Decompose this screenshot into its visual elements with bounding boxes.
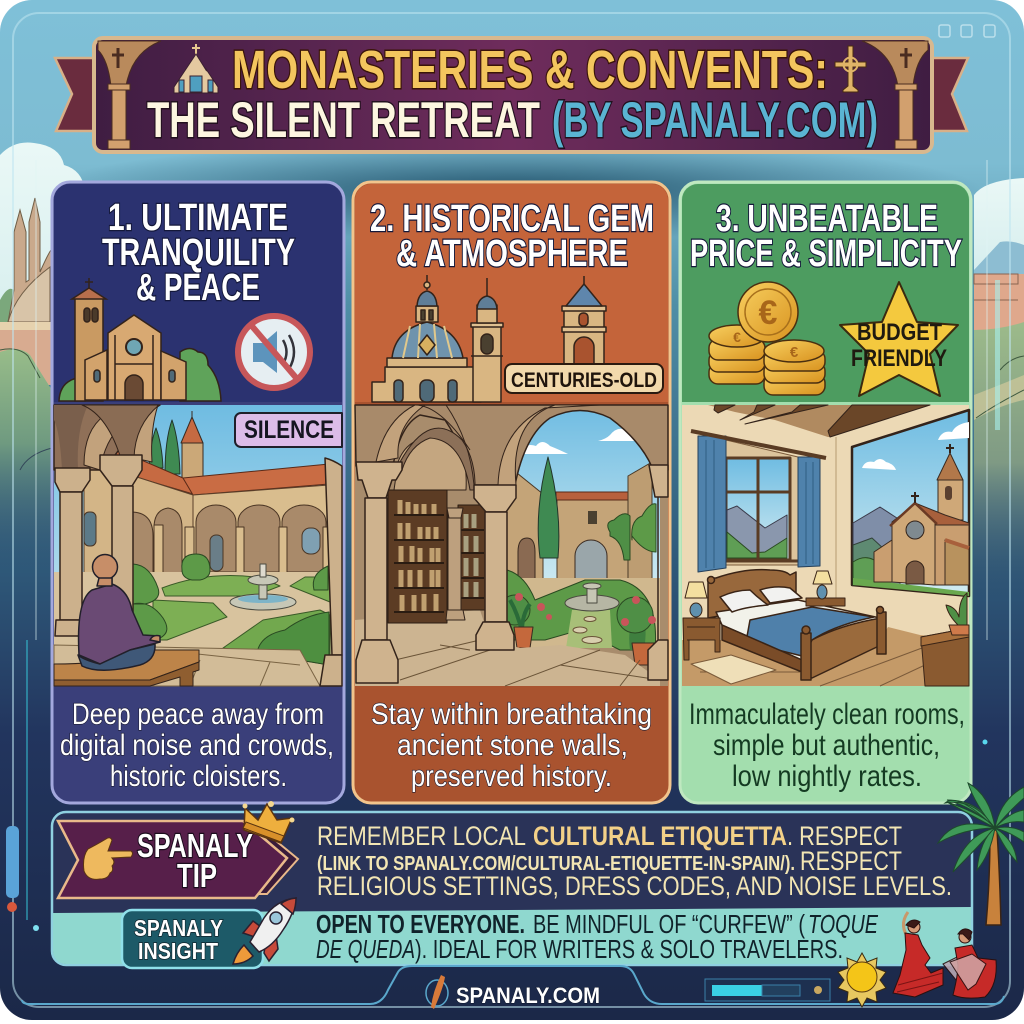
icon: sun (838, 953, 886, 1007)
foreground arches (54, 405, 160, 470)
tip copy: . RESPECT (787, 821, 902, 851)
panel 2: historical gem (353, 182, 670, 803)
insight badge (122, 898, 296, 968)
tip ribbon (58, 801, 298, 898)
body text (60, 698, 334, 793)
courtyard walls (507, 465, 543, 580)
bench (54, 650, 199, 680)
paving (355, 610, 660, 686)
courtyard ground (54, 572, 342, 686)
heading (102, 197, 295, 309)
scene: guest room (682, 405, 969, 686)
left side HUD: pill and dots (6, 640, 988, 931)
panel 3: price (680, 182, 971, 803)
insight badge: SPANALY (134, 915, 223, 941)
icon: church (59, 278, 221, 401)
tip ribbon: SPANALY (137, 827, 253, 864)
icon: euro coins: € (759, 294, 778, 332)
heading: & ATMOSPHERE (396, 233, 628, 275)
icon: euro coins: € (790, 344, 799, 361)
left window (726, 440, 798, 565)
tip copy: REMEMBER LOCAL (317, 821, 526, 851)
bed (708, 570, 886, 680)
scenery: left cathedral and hills (0, 142, 85, 600)
nightstands and lamps (683, 571, 969, 686)
tip copy: RESPECT (800, 846, 902, 876)
heading (690, 198, 962, 275)
body text (689, 698, 965, 793)
columns (55, 455, 342, 686)
tip ribbon: TIP (177, 857, 217, 894)
icon: cross (835, 46, 866, 92)
body text: Deep peace away from (72, 698, 324, 731)
progress widget (705, 979, 830, 1001)
insight copy: ). IDEAL FOR WRITERS & SOLO TRAVELERS. (415, 934, 843, 964)
icon: budget star: FRIENDLY (851, 345, 947, 372)
arcade (84, 505, 326, 575)
body text: low nightly rates. (732, 760, 922, 793)
icon: pointing hand (84, 838, 132, 879)
heading: & PEACE (136, 267, 260, 309)
bookshelves (388, 490, 485, 623)
silence tag: SILENCE (244, 416, 334, 444)
footer tab (22, 966, 1004, 1009)
heading line 2: THE SILENT RETREAT (147, 92, 540, 148)
banner plate (94, 38, 932, 152)
right window view (852, 410, 969, 596)
insight copy: DE QUEDA (316, 934, 415, 964)
heading: TRANQUILITY (102, 232, 295, 274)
icon: euro coins: € (733, 329, 741, 345)
tip copy: (LINK TO SPANALY.COM/CULTURAL-ETIQUETTE-IN-SPAIN/). (317, 853, 795, 875)
body text: ancient stone walls, (397, 729, 628, 762)
tip copy (317, 821, 952, 901)
scenery: right castle and hills (974, 178, 1024, 640)
insight copy (316, 909, 878, 964)
scene: library cloister (355, 405, 668, 686)
insight badge: INSIGHT (138, 938, 218, 964)
body text: preserved history. (411, 760, 612, 793)
tip panel (52, 801, 972, 968)
floor (682, 627, 969, 686)
centuries-old tag: CENTURIES-OLD (511, 369, 657, 392)
panel 1: tranquility (52, 182, 344, 803)
right arch pillar (862, 41, 928, 149)
centuries-old tag (505, 364, 663, 393)
silence tag (235, 413, 342, 447)
window control icons (939, 25, 995, 37)
icon: no sound (238, 316, 310, 388)
title banner (55, 38, 968, 152)
icon: rocket (233, 898, 296, 964)
body text: digital noise and crowds, (60, 729, 334, 762)
scene: cloister (54, 405, 342, 686)
icon: spanaly logo (426, 975, 448, 1009)
icon: chapel (174, 44, 218, 93)
insight copy: BE MINDFUL OF “CURFEW” ( (533, 909, 805, 939)
flamenco dancers (893, 912, 996, 998)
vault (355, 405, 668, 485)
body text (371, 698, 652, 793)
body text: Stay within breathtaking (371, 698, 652, 731)
pillars (356, 462, 668, 683)
person meditating (78, 554, 160, 670)
tip copy: CULTURAL ETIQUETTA (533, 821, 787, 851)
heading: 1. ULTIMATE (108, 197, 288, 239)
icon: budget star (840, 282, 958, 396)
icon: budget star: BUDGET (857, 319, 942, 346)
heading: 3. UNBEATABLE (716, 198, 938, 240)
ribbon ends (55, 58, 968, 131)
heading spanaly: (BY SPANALY.COM) (552, 92, 878, 148)
icon: cathedral (372, 275, 606, 402)
heading line 1: MONASTERIES & CONVENTS: (232, 40, 828, 100)
garden (507, 578, 660, 648)
footer tab: SPANALY.COM (456, 983, 600, 1008)
body text: simple but authentic, (713, 729, 940, 762)
palm tree (938, 783, 1024, 925)
icon: crown (242, 801, 294, 843)
insight copy: TOQUE (808, 909, 878, 939)
insight copy: OPEN TO EVERYONE. (316, 909, 525, 939)
heading: 2. HISTORICAL GEM (370, 198, 654, 240)
heading (370, 198, 654, 275)
left arch pillar (98, 41, 161, 149)
body text: historic cloisters. (110, 760, 287, 793)
icon: euro coins (709, 282, 825, 395)
